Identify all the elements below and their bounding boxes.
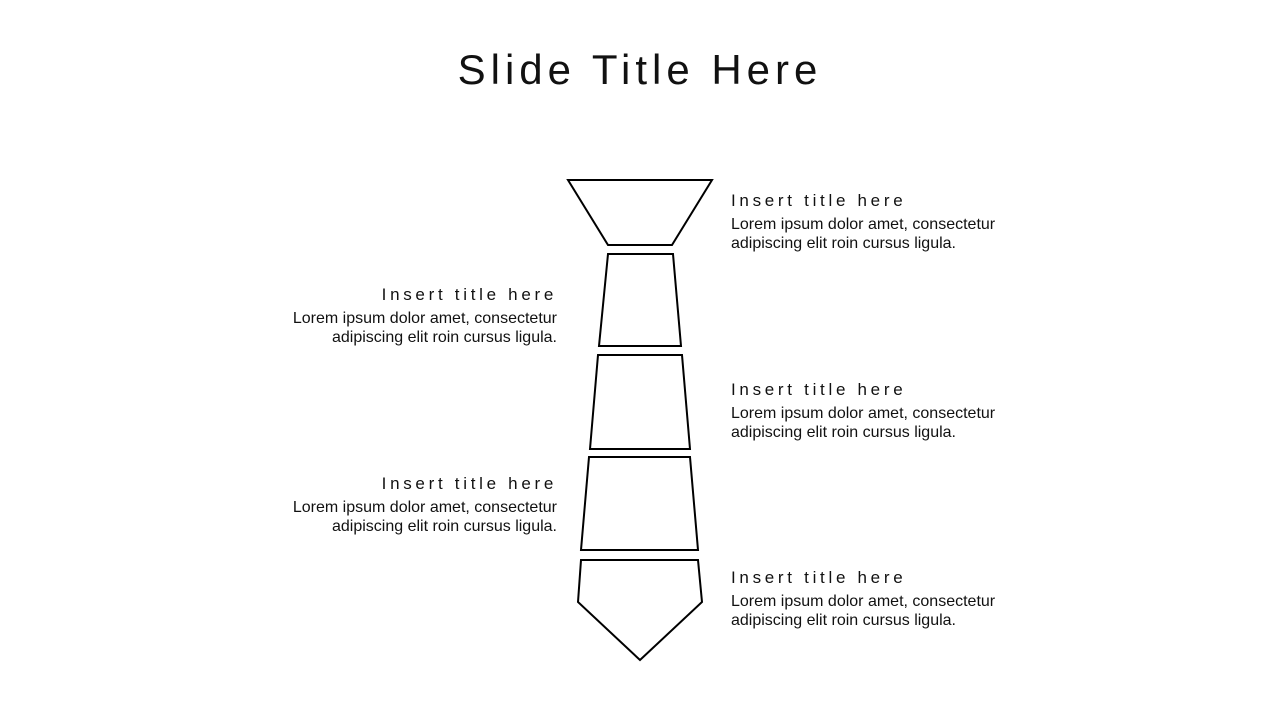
text block 4: Insert title here: [382, 474, 557, 493]
text block 5: [731, 568, 995, 629]
title: Slide Title Here: [458, 46, 822, 93]
text block 3: Lorem ipsum dolor amet, consectetur: [731, 405, 995, 422]
tie segment 2: [599, 254, 681, 346]
text block 2: Insert title here: [382, 285, 557, 304]
tie segment 3: [590, 355, 690, 449]
text block 2: adipiscing elit roin cursus ligula.: [332, 329, 557, 346]
text block 2: [293, 285, 557, 346]
text block 3: [731, 380, 995, 441]
text block 4: [293, 474, 557, 535]
text block 3: Insert title here: [731, 380, 906, 399]
text block 1: adipiscing elit roin cursus ligula.: [731, 235, 956, 252]
text block 5: Lorem ipsum dolor amet, consectetur: [731, 593, 995, 610]
tie segment 4: [581, 457, 698, 550]
text block 3: adipiscing elit roin cursus ligula.: [731, 424, 956, 441]
text block 1: [731, 191, 995, 252]
text block 2: Lorem ipsum dolor amet, consectetur: [293, 310, 557, 327]
tie knot: [568, 180, 712, 245]
text block 5: adipiscing elit roin cursus ligula.: [731, 612, 956, 629]
text block 4: Lorem ipsum dolor amet, consectetur: [293, 499, 557, 516]
tie tip: [578, 560, 702, 660]
text block 1: Insert title here: [731, 191, 906, 210]
text block 5: Insert title here: [731, 568, 906, 587]
text block 4: adipiscing elit roin cursus ligula.: [332, 518, 557, 535]
text block 1: Lorem ipsum dolor amet, consectetur: [731, 216, 995, 233]
